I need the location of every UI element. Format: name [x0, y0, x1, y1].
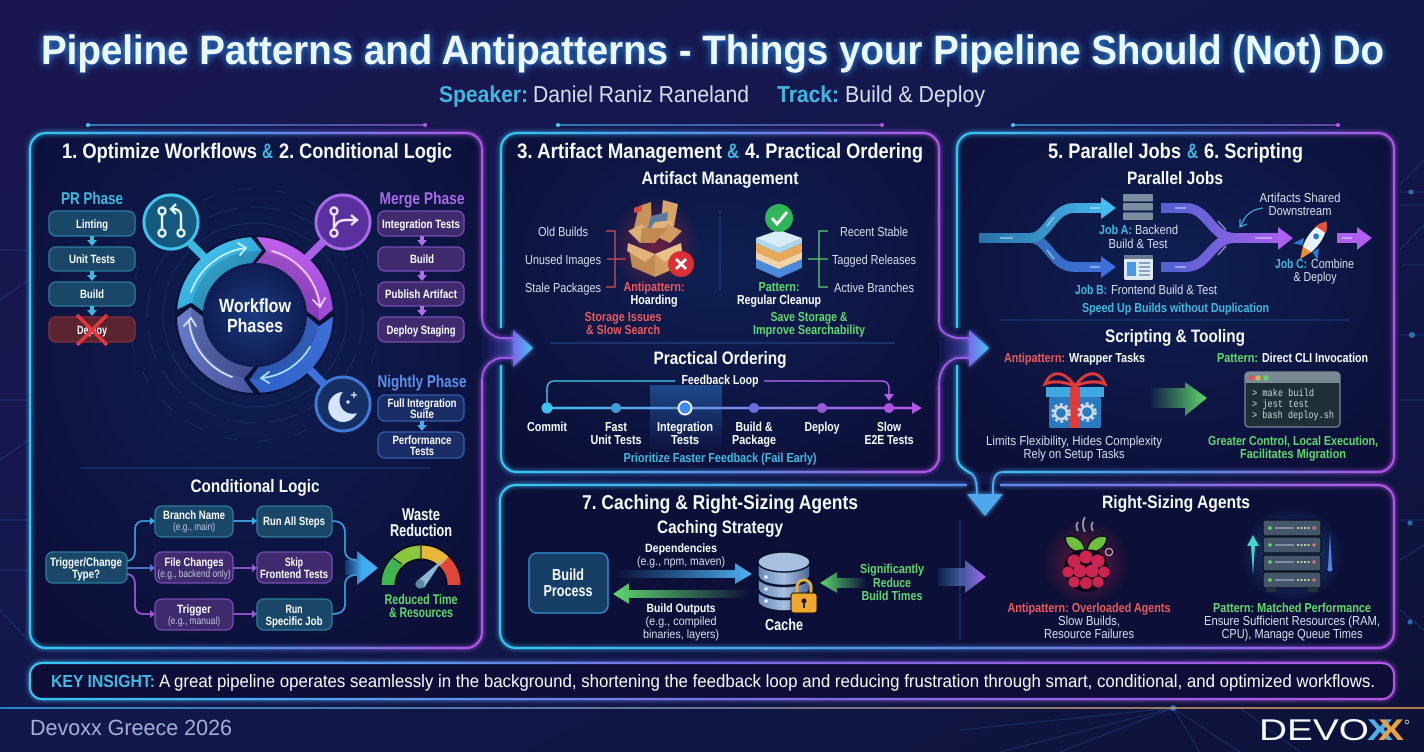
panel: optimize workflows and conditional logic	[30, 133, 482, 648]
panel heading: &	[262, 140, 273, 163]
pr phase column: Unit Tests	[69, 252, 115, 266]
antipattern and pattern consequences: Greater Control, Local Execution,	[1208, 433, 1378, 448]
icon: terminal	[1245, 372, 1340, 427]
icon: matched server rack	[1240, 507, 1344, 603]
antipattern label	[584, 279, 684, 337]
feedback loop timeline: Unit Tests	[590, 432, 642, 447]
job labels: Frontend Build & Test	[1111, 282, 1217, 297]
icon: cache database	[758, 552, 817, 613]
antipattern inputs: Stale Packages	[525, 280, 601, 295]
decision nodes: (e.g., main)	[173, 521, 215, 533]
antipattern and pattern consequences: Rely on Setup Tasks	[1024, 446, 1125, 461]
conditional logic heading: Conditional Logic	[190, 476, 320, 496]
job labels: Job A:	[1099, 222, 1132, 237]
antipattern and pattern labels: Pattern:	[1217, 350, 1258, 365]
nightly phase column	[378, 372, 466, 458]
pattern label: Regular Cleanup	[737, 292, 821, 307]
decision nodes: Run All Steps	[263, 514, 325, 528]
pattern label: Save Storage &	[770, 309, 848, 324]
subtitle: speaker and track	[439, 81, 985, 107]
decision nodes: Run	[286, 602, 302, 616]
pattern retained items	[832, 224, 916, 295]
antipattern and pattern labels: Antipattern:	[1004, 350, 1065, 365]
antipattern and pattern consequences	[986, 433, 1378, 461]
decision nodes: Branch Name	[163, 508, 225, 522]
pattern label: Pattern:	[758, 279, 800, 294]
parallel jobs heading: Parallel Jobs	[1127, 168, 1223, 188]
decision nodes: (e.g., manual)	[168, 615, 220, 627]
icon: terminal: > bash deploy.sh	[1252, 410, 1334, 422]
antipattern label: Storage Issues	[584, 309, 662, 324]
merge phase column: Integration Tests	[382, 217, 460, 231]
pr phase column: Deploy	[77, 323, 107, 337]
pr phase column: Build	[80, 287, 104, 301]
build process box: Build	[552, 567, 584, 584]
antipattern inputs: Old Builds	[538, 224, 588, 239]
feedback loop timeline: Tests	[671, 432, 699, 447]
panel heading	[62, 140, 452, 163]
scripting and tooling heading: Scripting & Tooling	[1105, 326, 1245, 346]
arrow: build outputs to build process: binaries, layers)	[643, 627, 719, 641]
arrow: build outputs to build process: Build Outputs	[646, 601, 716, 615]
pattern retained items: Recent Stable	[840, 224, 908, 239]
waste reduction gauge: Reduction	[390, 521, 452, 540]
antipattern: overloaded agents	[1008, 600, 1170, 641]
antipattern label: & Slow Search	[586, 322, 660, 337]
subtitle: speaker and track: Daniel Raniz Raneland	[533, 81, 749, 107]
pattern: matched performance: CPU), Manage Queue Times	[1222, 626, 1363, 641]
icon: backend server	[1123, 194, 1153, 220]
panel heading: 4. Practical Ordering	[745, 140, 923, 163]
pattern retained items: Tagged Releases	[832, 252, 916, 267]
icon: hoarding box	[610, 197, 700, 293]
footer: devoxx logo: DEVO	[1259, 714, 1369, 747]
nightly phase column: Performance	[392, 433, 452, 447]
arrow: caching to right-sizing	[938, 560, 986, 593]
nightly phase column: Suite	[410, 407, 434, 421]
arrow: dependencies to cache: Dependencies	[645, 541, 717, 555]
feedback loop timeline: Deploy	[804, 419, 840, 434]
antipattern inputs	[525, 224, 601, 295]
callout: reduce build times: Build Times	[862, 588, 922, 603]
waste reduction gauge: Reduced Time	[384, 591, 458, 607]
arrow: build outputs to build process: (e.g., compiled	[646, 614, 716, 628]
pattern: matched performance	[1204, 600, 1380, 641]
icon: terminal: > jest test	[1252, 399, 1309, 411]
footer: devoxx logo: X	[1378, 714, 1404, 747]
feedback loop timeline: Feedback Loop	[682, 372, 759, 387]
job labels	[1075, 190, 1354, 315]
nightly phase column: Full Integration	[388, 396, 456, 410]
antipattern and pattern labels: Direct CLI Invocation	[1262, 350, 1368, 365]
panel: parallel jobs and scripting	[957, 133, 1394, 474]
callout: reduce build times: Significantly	[860, 561, 925, 576]
waste reduction gauge	[384, 505, 458, 620]
arrow: antipattern to pattern	[1149, 382, 1207, 416]
antipattern: overloaded agents: Slow Builds,	[1058, 613, 1120, 628]
panel heading: 7. Caching & Right-Sizing Agents	[582, 492, 858, 514]
pattern: matched performance: Pattern: Matched Performance	[1213, 600, 1371, 615]
icon: frontend window	[1124, 255, 1153, 280]
antipattern: overloaded agents: Resource Failures	[1044, 626, 1134, 641]
nightly phase column: Nightly Phase	[378, 372, 466, 391]
antipattern and pattern labels	[1004, 350, 1368, 365]
feedback loop timeline: Prioritize Faster Feedback (Fail Early)	[624, 450, 816, 465]
subtitle: speaker and track: Track:	[777, 81, 839, 107]
panel heading	[517, 140, 923, 163]
antipattern and pattern consequences: Facilitates Migration	[1240, 446, 1346, 461]
icon: red cross over deploy	[78, 316, 106, 344]
job labels: Speed Up Builds without Duplication	[1082, 300, 1269, 315]
key insight bar: A great pipeline operates seamlessly in the background, shortening the feedback loop and reducing frustration through smart, conditional, and optimized workflows.	[159, 671, 1375, 691]
footer: devoxx logo	[1259, 714, 1409, 747]
callout: reduce build times	[860, 561, 925, 603]
callout: reduce build times: Reduce	[873, 575, 911, 590]
pattern: matched performance: Ensure Sufficient Resources (RAM,	[1204, 613, 1380, 628]
key insight bar	[30, 663, 1394, 699]
ring centre label	[219, 296, 291, 337]
pattern label	[737, 279, 866, 337]
job labels: Downstream	[1268, 203, 1332, 218]
pr phase column: PR Phase	[61, 189, 123, 208]
job labels: Artifacts Shared	[1260, 190, 1340, 205]
caching strategy heading: Caching Strategy	[657, 517, 783, 537]
pattern retained items: Active Branches	[834, 280, 914, 295]
decision nodes: Trigger/Change	[50, 555, 122, 569]
icon: gift wrapper	[1045, 374, 1105, 428]
arrows: panel connectors	[482, 317, 1003, 516]
pattern label: Improve Searchability	[753, 322, 866, 337]
merge phase column: Merge Phase	[380, 189, 464, 208]
panel heading: 5. Parallel Jobs	[1048, 140, 1181, 163]
merge phase column: Build	[410, 252, 434, 266]
icon: terminal: > make build	[1252, 388, 1314, 400]
cache label: Cache	[765, 617, 803, 634]
decision nodes: Skip	[285, 555, 303, 569]
antipattern and pattern consequences: Limits Flexibility, Hides Complexity	[986, 433, 1162, 448]
job labels: Job C:	[1275, 256, 1307, 271]
panel: artifact management and practical ordering	[501, 133, 939, 472]
panel heading: 2. Conditional Logic	[279, 140, 452, 163]
parallel flow arrows	[979, 208, 1358, 267]
arrow: dependencies to cache: (e.g., npm, maven)	[637, 554, 725, 568]
feedback loop timeline: Slow	[877, 419, 902, 434]
nightly phase column: Tests	[410, 444, 434, 458]
job labels: Backend	[1135, 222, 1178, 237]
arrow: into waste reduction	[345, 551, 378, 585]
conditional logic connectors	[127, 521, 357, 614]
icon: rocket	[1288, 213, 1339, 268]
feedback loop timeline: E2E Tests	[864, 432, 914, 447]
job labels: Build & Test	[1108, 236, 1168, 251]
feedback loop timeline	[527, 372, 922, 465]
antipattern and pattern labels: Wrapper Tasks	[1069, 350, 1145, 365]
waste reduction gauge: & Resources	[389, 604, 453, 620]
job labels: & Deploy	[1294, 269, 1337, 284]
practical ordering heading: Practical Ordering	[654, 348, 786, 368]
subtitle: speaker and track: Speaker:	[439, 81, 528, 107]
icon: moon	[316, 377, 370, 431]
footer: event name: Devoxx Greece 2026	[30, 715, 232, 740]
decision nodes: File Changes	[164, 555, 224, 569]
pr phase column: Linting	[76, 217, 108, 231]
job labels: Job B:	[1075, 282, 1107, 297]
arrow: reduce build times	[820, 572, 867, 593]
decision nodes: Specific Job	[266, 614, 322, 628]
feedback loop timeline: Integration	[657, 419, 713, 434]
arrow: build outputs to build process	[613, 583, 751, 641]
ring centre label: Workflow	[219, 296, 291, 317]
arrow: dependencies to cache	[615, 541, 752, 584]
pr phase column	[49, 189, 135, 344]
build process box	[529, 553, 608, 613]
build process box: Process	[544, 583, 593, 600]
footer: devoxx logo: X	[1367, 714, 1393, 747]
decision nodes: (e.g., backend only)	[158, 568, 230, 580]
right-sizing heading: Right-Sizing Agents	[1102, 492, 1250, 512]
key insight bar: KEY INSIGHT:	[51, 671, 155, 691]
subtitle: speaker and track: Build & Deploy	[845, 81, 985, 107]
antipattern inputs: Unused Images	[525, 252, 601, 267]
merge phase column	[378, 189, 464, 342]
panel heading	[1048, 140, 1303, 163]
job labels: Combine	[1311, 256, 1354, 271]
merge phase column: Publish Artifact	[385, 287, 457, 301]
antipattern label: Hoarding	[630, 292, 678, 307]
feedback loop timeline: Commit	[527, 419, 568, 434]
ring centre label: Phases	[227, 316, 283, 337]
antipattern label: Antipattern:	[624, 279, 684, 294]
arrow: artifacts shared	[1240, 208, 1263, 227]
decision nodes: Frontend Tests	[260, 567, 328, 581]
artifact management heading: Artifact Management	[642, 168, 799, 188]
feedback loop timeline: Build &	[736, 419, 772, 434]
waste reduction gauge: Waste	[402, 505, 440, 524]
feedback loop timeline: Fast	[605, 419, 628, 434]
panel heading: &	[1187, 140, 1198, 163]
merge phase column: Deploy Staging	[386, 323, 456, 337]
feedback loop timeline: Package	[732, 432, 776, 447]
workflow phases ring	[175, 235, 335, 395]
icon: overloaded raspberry	[1042, 517, 1130, 607]
panel: caching and right-sizing agents	[500, 485, 1394, 648]
panel heading: &	[727, 140, 739, 163]
icon: merge branch	[316, 195, 370, 249]
panel heading: 3. Artifact Management	[517, 140, 722, 163]
decision nodes: Type?	[72, 567, 100, 581]
antipattern: overloaded agents: Antipattern: Overloaded Agents	[1008, 600, 1170, 615]
icon: pull request	[144, 195, 198, 249]
decision nodes: Trigger	[177, 602, 211, 616]
icon: clean layered stack	[756, 204, 802, 278]
panel heading: 1. Optimize Workflows	[62, 140, 257, 163]
panel heading: 6. Scripting	[1204, 140, 1303, 163]
decision nodes	[46, 506, 332, 630]
